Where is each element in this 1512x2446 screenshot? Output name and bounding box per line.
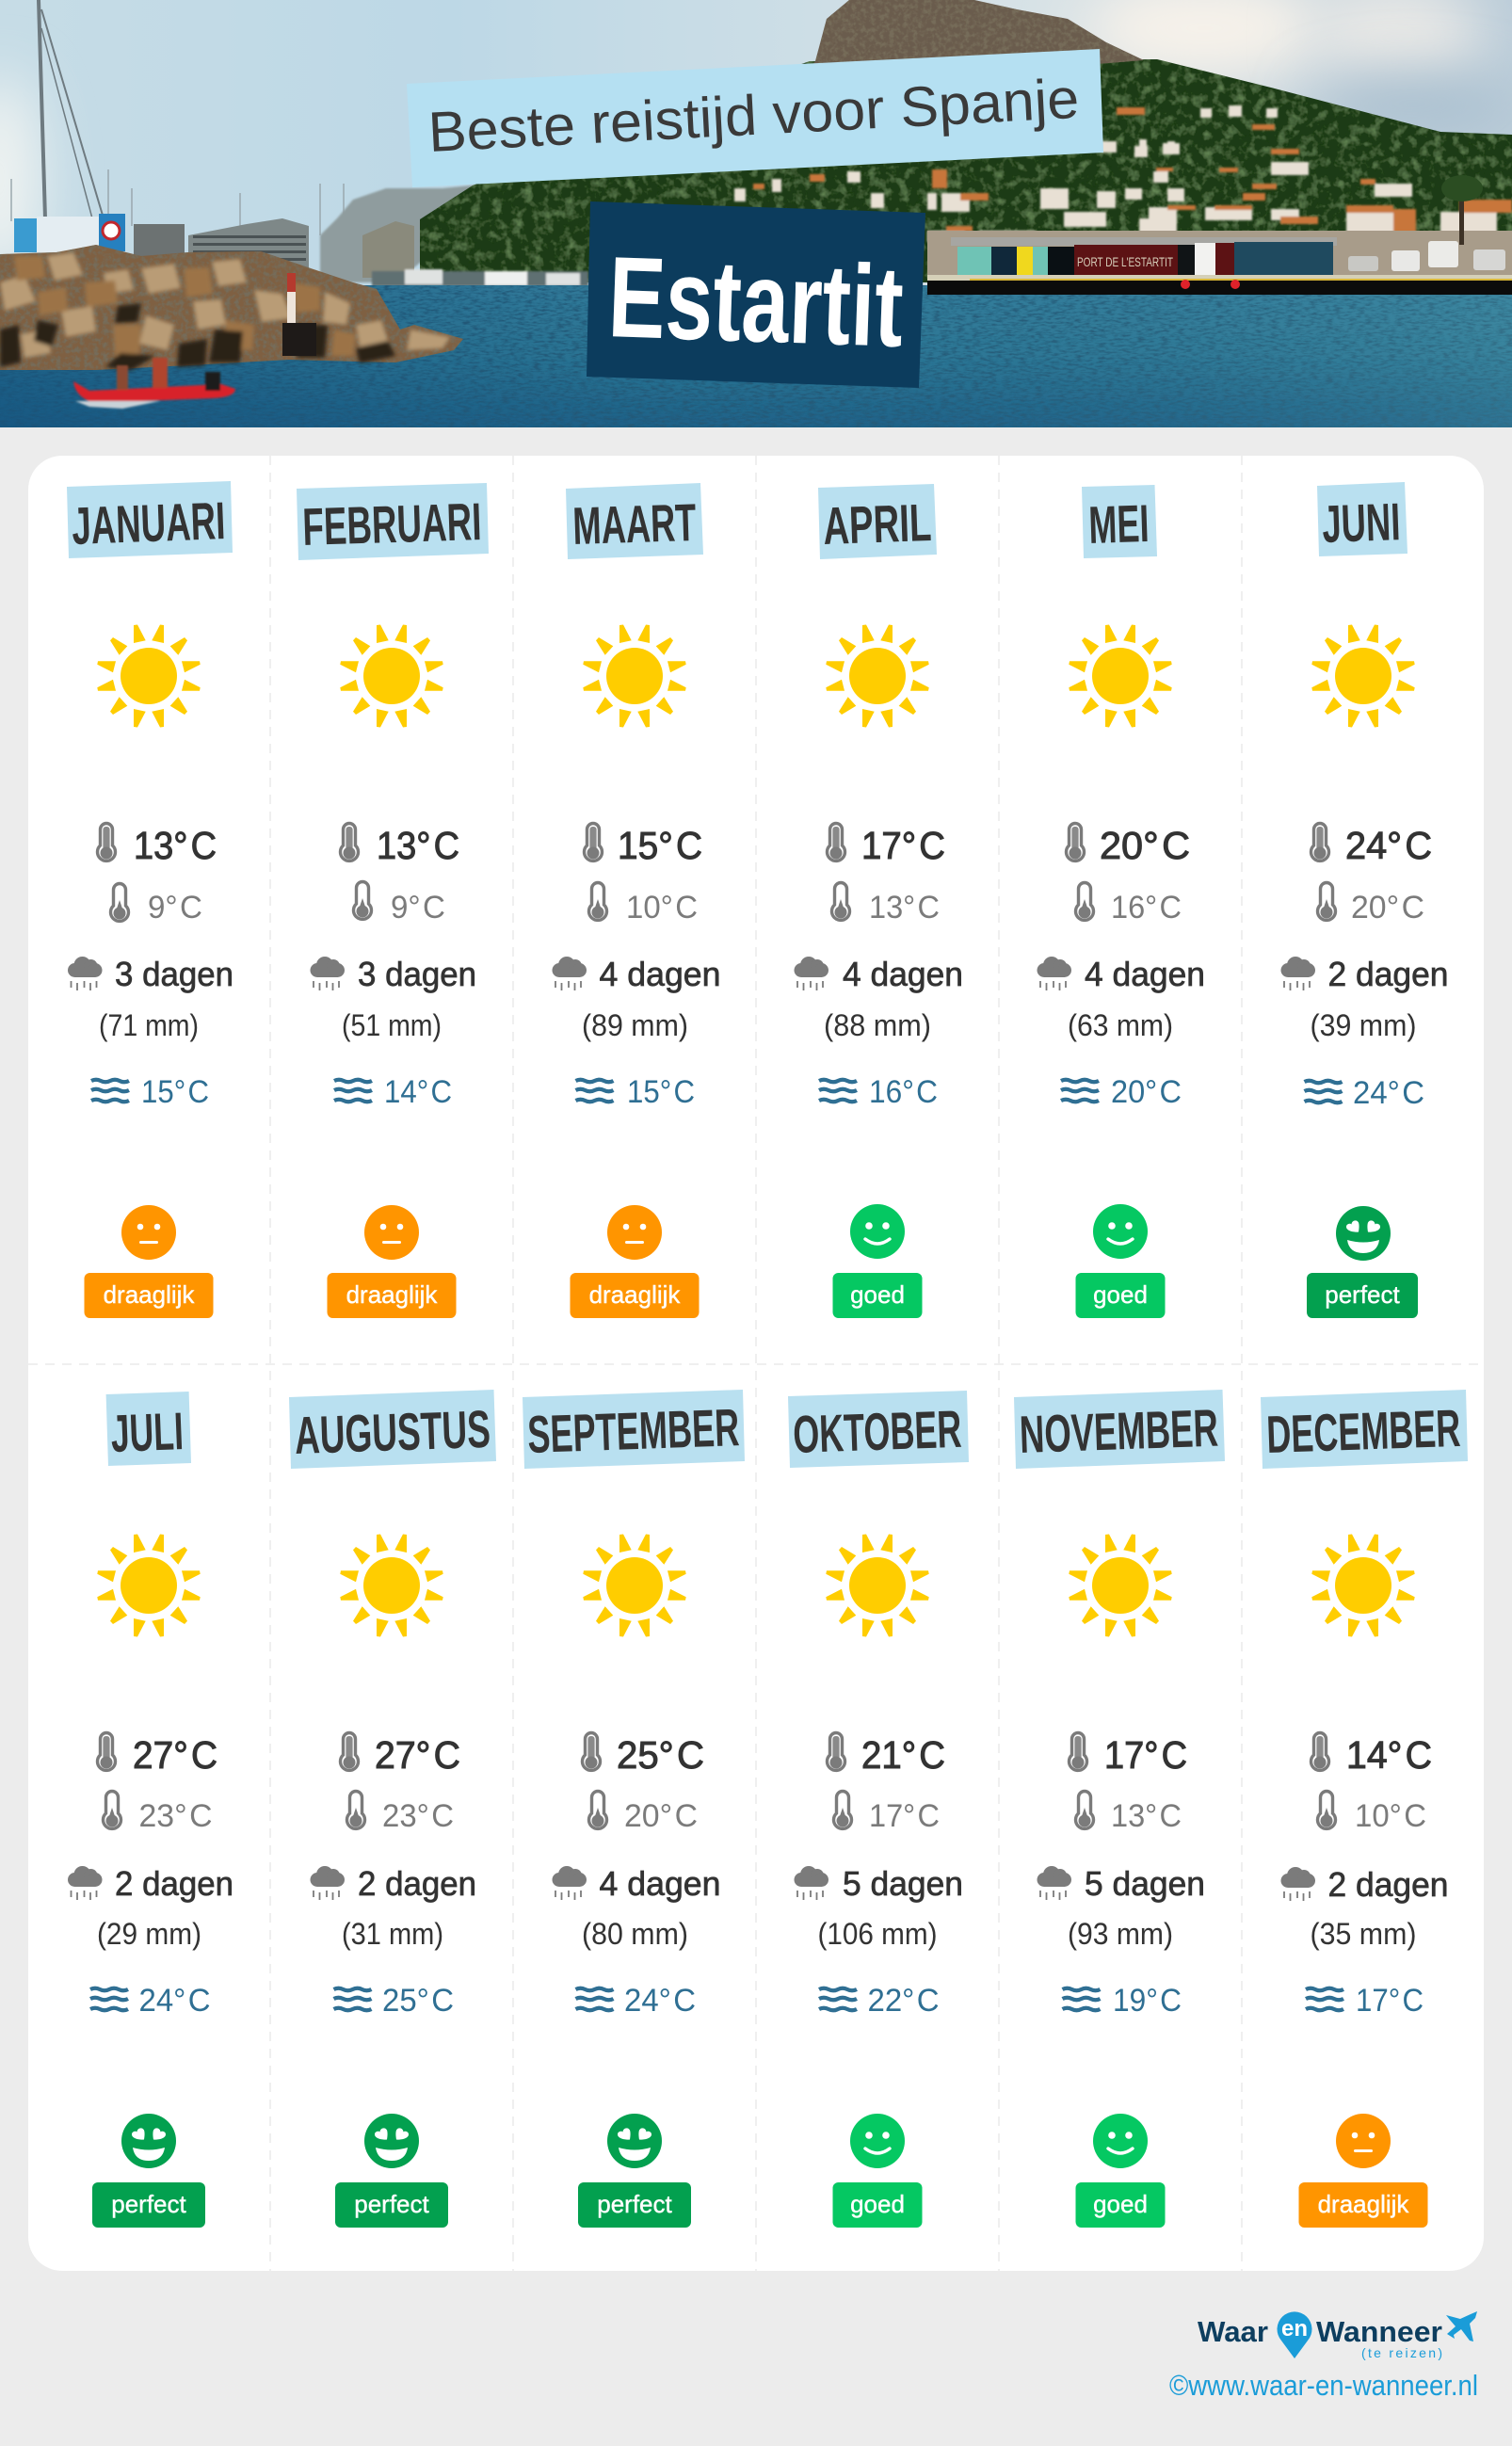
sea temperature	[576, 1074, 695, 1110]
rainfall: (93 mm)	[1068, 1917, 1173, 1951]
quay	[927, 275, 1512, 295]
icon: sun	[583, 1535, 686, 1636]
sea temperature: 19° C	[1113, 1983, 1182, 2019]
rating: draaglijk: draaglijk	[346, 1280, 438, 1309]
rating: draaglijk	[328, 1205, 456, 1318]
rainfall: (51 mm)	[342, 1008, 442, 1042]
low temperature: 17° C	[869, 1798, 940, 1834]
rainfall: (80 mm)	[582, 1917, 688, 1951]
sea temperature	[819, 1983, 940, 2019]
heading: februari	[297, 483, 489, 560]
rating: goed: goed	[850, 2190, 905, 2218]
high temperature	[341, 823, 459, 867]
high temperature: 13° C	[377, 824, 459, 867]
icon: sun	[826, 1535, 929, 1636]
port building	[927, 231, 1512, 276]
heading: april: APRIL	[822, 492, 932, 555]
rating: draaglijk: draaglijk	[104, 1280, 195, 1309]
low temperature	[346, 1791, 454, 1834]
sea temperature: 15° C	[627, 1074, 695, 1110]
low temperature: 23° C	[139, 1798, 213, 1834]
rainfall: (106 mm)	[817, 1917, 938, 1951]
high temperature: 27° C	[375, 1733, 460, 1777]
icon: sun	[340, 1535, 443, 1636]
rainfall: (35 mm)	[1311, 1917, 1416, 1951]
rainfall: (88 mm)	[824, 1008, 931, 1042]
sea temperature: 24° C	[139, 1983, 211, 2019]
marina boats	[372, 269, 588, 286]
heading: maart: MAART	[571, 492, 697, 555]
high temperature	[827, 1732, 945, 1777]
destination title: Estartit: Estartit	[606, 233, 906, 371]
cars	[1348, 175, 1505, 271]
rating: perfect: perfect	[1325, 1280, 1401, 1309]
panel: mei	[1037, 485, 1205, 1318]
website url: ©www.waar-en-wanneer.nl	[1169, 2369, 1478, 2402]
title banner	[407, 49, 1103, 187]
sea temperature: 17° C	[1356, 1983, 1424, 2019]
high temperature	[582, 1732, 704, 1777]
rating: goed	[1075, 2114, 1166, 2228]
low temperature: 23° C	[382, 1798, 454, 1834]
icon: sun	[97, 1535, 201, 1636]
destination title: Estartit	[587, 201, 925, 388]
heading: september: SEPTEMBER	[526, 1397, 740, 1464]
sea temperature: 22° C	[868, 1983, 940, 2019]
town on the hillside	[734, 105, 1512, 243]
sea temperature: 24° C	[624, 1983, 696, 2019]
sea temperature	[1306, 1983, 1424, 2019]
high temperature	[827, 823, 945, 867]
high temperature: 27° C	[133, 1733, 217, 1777]
icon: sun	[97, 625, 201, 727]
rainy days: 4 dagen	[1085, 955, 1205, 993]
high temperature: 13° C	[134, 824, 217, 867]
low temperature	[354, 881, 445, 925]
rating: perfect: perfect	[111, 2190, 187, 2218]
logo: Waar en Wanneer: (te reizen)	[1361, 2345, 1442, 2360]
heading: mei	[1082, 485, 1157, 558]
sea temperature	[333, 1983, 454, 2019]
rating: draaglijk: draaglijk	[1318, 2190, 1409, 2218]
rainfall: (39 mm)	[1311, 1008, 1416, 1042]
sea temperature: 14° C	[384, 1074, 452, 1110]
low temperature: 16° C	[1111, 890, 1182, 925]
rocks breakwater	[0, 245, 463, 370]
logo: Waar en Wanneer: Waar	[1198, 2315, 1268, 2348]
heading: november: NOVEMBER	[1019, 1398, 1219, 1464]
port building: PORT DE L'ESTARTIT	[1077, 254, 1173, 269]
rating: draaglijk	[1299, 2114, 1427, 2228]
sign	[14, 214, 125, 252]
panel: juli	[68, 1392, 233, 2228]
rating: perfect: perfect	[354, 2190, 430, 2218]
low temperature: 13° C	[1111, 1798, 1182, 1834]
sea temperature	[1305, 1075, 1424, 1111]
sea temperature: 15° C	[141, 1074, 209, 1110]
sea temperature	[819, 1074, 938, 1110]
heading: maart	[566, 483, 703, 559]
low temperature	[104, 1791, 213, 1834]
sea temperature	[91, 1074, 209, 1110]
panel: juni	[1280, 482, 1448, 1318]
panel: januari	[67, 481, 233, 1318]
low temperature: 10° C	[1355, 1798, 1426, 1834]
heading: augustus: AUGUSTUS	[294, 1399, 491, 1465]
rating: perfect	[578, 2114, 691, 2228]
sea temperature	[1061, 1074, 1182, 1110]
rainy days	[68, 955, 233, 993]
low temperature	[1075, 1791, 1182, 1834]
panel: november	[1014, 1390, 1225, 2228]
rainy days	[311, 1864, 476, 1903]
high temperature: 17° C	[1104, 1733, 1187, 1777]
rainfall: (31 mm)	[342, 1917, 443, 1951]
rainy days: 4 dagen	[599, 955, 721, 993]
logo: Waar en Wanneer: Wanneer	[1316, 2315, 1442, 2348]
sea temperature: 25° C	[382, 1983, 454, 2019]
icon: sun	[1311, 1535, 1415, 1636]
rating: perfect: perfect	[597, 2190, 673, 2218]
rainy days: 4 dagen	[599, 1864, 721, 1903]
rainfall: (63 mm)	[1068, 1008, 1173, 1042]
rainy days: 5 dagen	[1085, 1864, 1205, 1903]
sea temperature: 20° C	[1111, 1074, 1182, 1110]
rating: goed: goed	[850, 1280, 905, 1309]
sea temperature: 16° C	[869, 1074, 938, 1110]
rainfall: (71 mm)	[99, 1008, 199, 1042]
low temperature: 13° C	[869, 890, 940, 925]
rating: perfect	[92, 2114, 205, 2228]
high temperature: 17° C	[861, 824, 945, 867]
rating: goed: goed	[1093, 2190, 1148, 2218]
rainy days	[68, 1864, 233, 1903]
rainy days: 2 dagen	[115, 1864, 233, 1903]
sea temperature	[90, 1983, 211, 2019]
rating: goed	[832, 1204, 923, 1318]
high temperature	[98, 823, 217, 867]
low temperature: 9° C	[148, 890, 202, 925]
heading: oktober	[788, 1391, 969, 1468]
heading: juni: JUNI	[1321, 491, 1401, 554]
high temperature	[1070, 1732, 1187, 1777]
high temperature: 21° C	[861, 1733, 945, 1777]
red boat	[73, 358, 235, 409]
logo: Waar en Wanneer: en	[1281, 2316, 1308, 2341]
heading: november	[1014, 1390, 1225, 1469]
rainy days: 4 dagen	[843, 955, 963, 993]
heading: september	[523, 1390, 745, 1469]
rating: goed	[1075, 1204, 1166, 1318]
rainfall: (89 mm)	[582, 1008, 688, 1042]
sea	[0, 285, 1512, 427]
heading: oktober: OKTOBER	[792, 1399, 962, 1464]
panel: april	[795, 484, 963, 1318]
low temperature: 20° C	[1351, 890, 1424, 925]
heading: januari: JANUARI	[71, 491, 226, 555]
sea temperature	[1062, 1983, 1182, 2019]
heading: januari	[67, 481, 233, 558]
rating: draaglijk: draaglijk	[589, 1280, 681, 1309]
calendar card	[28, 456, 1484, 2271]
icon: sun	[826, 625, 929, 727]
low temperature	[111, 883, 202, 925]
rainy days: 3 dagen	[115, 955, 233, 993]
high temperature: 24° C	[1345, 824, 1432, 867]
sea temperature	[334, 1074, 452, 1110]
low temperature: 9° C	[391, 890, 445, 925]
low temperature	[834, 1791, 940, 1834]
rainy days: 5 dagen	[843, 1864, 963, 1903]
icon: map pin	[1278, 2311, 1312, 2358]
sea temperature	[576, 1983, 696, 2019]
rating: goed: goed	[1093, 1280, 1148, 1309]
low temperature	[832, 883, 940, 925]
low temperature: 20° C	[624, 1798, 698, 1834]
panel: maart	[552, 483, 721, 1318]
title banner: Beste reistijd voor Spanje	[426, 67, 1081, 164]
rating: draaglijk	[571, 1205, 699, 1318]
icon: sun	[1311, 625, 1415, 727]
panel: augustus	[289, 1390, 496, 2228]
high temperature	[1311, 823, 1432, 867]
low temperature	[1318, 1791, 1426, 1834]
rating: goed	[832, 2114, 923, 2228]
rainy days: 2 dagen	[358, 1864, 476, 1903]
rainy days: 3 dagen	[358, 955, 476, 993]
low temperature	[589, 883, 698, 925]
high temperature: 25° C	[617, 1733, 704, 1777]
heading: juni	[1317, 482, 1407, 556]
heading: april	[818, 484, 937, 559]
icon: sun	[583, 625, 686, 727]
low temperature: 10° C	[626, 890, 698, 925]
panel: februari	[297, 483, 489, 1318]
high temperature	[98, 1732, 217, 1777]
heading: februari: FEBRUARI	[301, 491, 482, 556]
rainfall: (29 mm)	[97, 1917, 201, 1951]
heading: juli	[106, 1392, 191, 1466]
high temperature	[341, 1732, 460, 1777]
logo: Waar en Wanneer	[1198, 2311, 1477, 2360]
panel: december	[1261, 1390, 1468, 2228]
heading: juli: JULI	[110, 1401, 185, 1463]
heading: mei: MEI	[1087, 493, 1150, 555]
high temperature	[1311, 1732, 1432, 1777]
rainy days	[311, 955, 476, 993]
hero photo: Estartit harbour	[0, 0, 1512, 427]
rating: draaglijk	[85, 1205, 213, 1318]
high temperature	[584, 823, 702, 867]
panel: oktober	[788, 1391, 969, 2228]
rainy days: 2 dagen	[1327, 1865, 1448, 1904]
low temperature	[589, 1791, 698, 1834]
low temperature	[1318, 883, 1424, 925]
icon: sun	[1069, 1535, 1172, 1636]
high temperature: 14° C	[1346, 1733, 1432, 1777]
sea temperature: 24° C	[1353, 1075, 1424, 1111]
high temperature: 15° C	[618, 824, 702, 867]
icon: sun	[340, 625, 443, 727]
rating: perfect	[335, 2114, 448, 2228]
high temperature: 20° C	[1100, 824, 1190, 867]
rainy days: 2 dagen	[1327, 955, 1448, 993]
icon: plane	[1446, 2311, 1477, 2341]
heading: augustus	[289, 1390, 496, 1469]
icon: sun	[1069, 625, 1172, 727]
rating: perfect	[1307, 1206, 1418, 1318]
panel: september	[523, 1390, 745, 2228]
low temperature	[1075, 883, 1182, 925]
